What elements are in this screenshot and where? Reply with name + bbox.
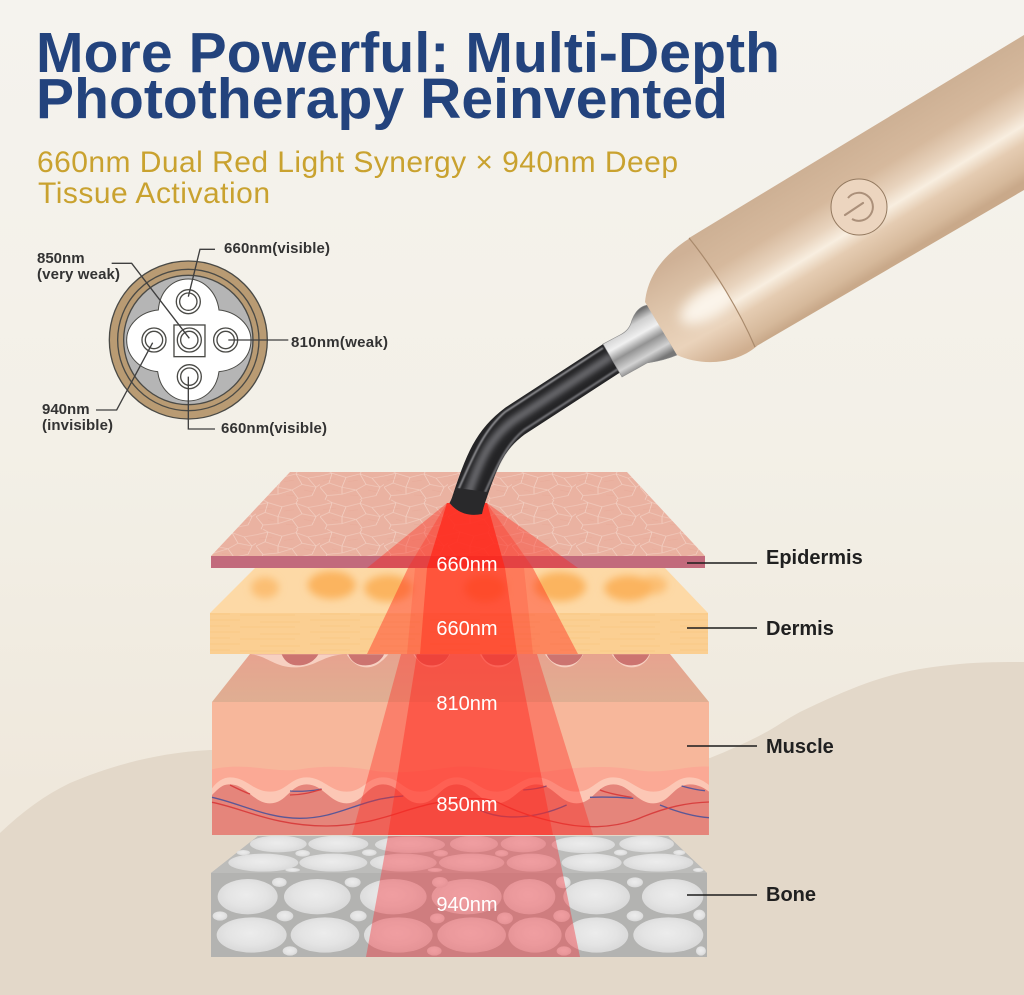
beam: muscle bbox=[352, 654, 593, 835]
device: light therapy wand bbox=[450, 35, 1024, 515]
muscle front bbox=[212, 702, 709, 835]
device: silver collar bbox=[603, 305, 677, 377]
epidermis layer bbox=[211, 472, 705, 568]
device: handle body bbox=[689, 35, 1024, 347]
diagram labels bbox=[37, 240, 388, 437]
device: rounded nose bbox=[645, 238, 757, 362]
title bbox=[36, 21, 780, 131]
diagram labels: (very weak) bbox=[37, 266, 120, 283]
wavelength labels: 940nm bbox=[436, 894, 498, 916]
layer leader lines and labels bbox=[687, 547, 863, 906]
layer labels bbox=[766, 547, 863, 906]
subtitle bbox=[37, 146, 678, 210]
layer labels: Muscle bbox=[766, 736, 834, 758]
diagram labels: 940nm bbox=[42, 401, 90, 418]
title: More Powerful: Multi-Depth bbox=[36, 21, 780, 85]
diagram: LED head bbox=[96, 249, 288, 429]
wavelength labels: 660nm bbox=[436, 618, 498, 640]
wavelength labels: 850nm bbox=[436, 794, 498, 816]
beam: epidermis fan bbox=[367, 503, 578, 568]
layer labels: Bone bbox=[766, 884, 816, 906]
layer labels: Epidermis bbox=[766, 547, 863, 569]
dermis layer bbox=[210, 568, 708, 654]
light beams bbox=[352, 503, 593, 957]
bone cells bbox=[213, 836, 706, 956]
background hill bbox=[0, 662, 1024, 995]
beam: bone bbox=[366, 836, 580, 957]
wavelength labels bbox=[436, 554, 498, 916]
device: seam bbox=[689, 238, 755, 347]
muscle top surface bbox=[212, 654, 709, 702]
muscle wave tissue and vessels bbox=[212, 766, 709, 835]
diagram labels: 660nm(visible) bbox=[221, 420, 327, 437]
muscle layer bbox=[212, 654, 709, 835]
device: nose highlight bbox=[673, 271, 751, 333]
beam: dermis bbox=[367, 568, 578, 654]
dermis spots bbox=[251, 571, 667, 602]
subtitle: 660nm Dual Red Light Synergy × 940nm Deep bbox=[37, 146, 678, 179]
diagram labels: 810nm(weak) bbox=[291, 334, 388, 351]
muscle scallops bbox=[250, 654, 650, 667]
title: Phototherapy Reinvented bbox=[36, 67, 728, 131]
LED layout diagram bbox=[37, 240, 388, 437]
icon: power button bbox=[831, 179, 887, 235]
subtitle: Tissue Activation bbox=[38, 177, 270, 210]
diagram labels: (invisible) bbox=[42, 417, 113, 434]
device: black bent tube bbox=[456, 348, 618, 508]
bone layer bbox=[211, 836, 707, 957]
diagram labels: 660nm(visible) bbox=[224, 240, 330, 257]
device: tube tip bbox=[450, 488, 487, 515]
wavelength labels: 810nm bbox=[436, 693, 498, 715]
diagram labels: 850nm bbox=[37, 250, 85, 267]
wavelength labels: 660nm bbox=[436, 554, 498, 576]
layer labels: Dermis bbox=[766, 618, 834, 640]
